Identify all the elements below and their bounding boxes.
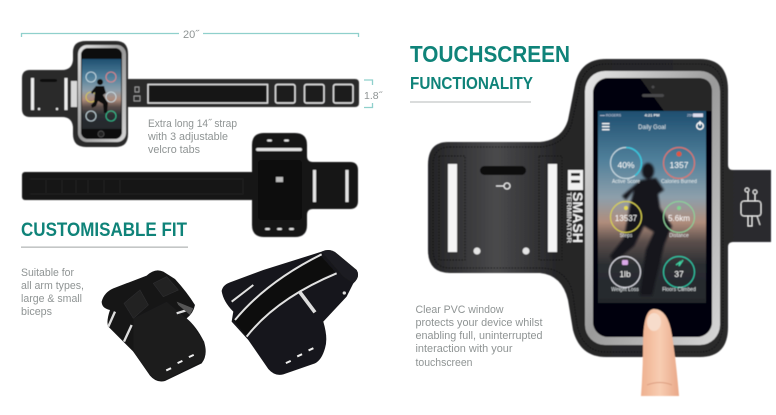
strap icon: earphones [741, 188, 761, 226]
runner [91, 79, 108, 113]
text: clear PVC description: enabling full, uninterrupted [416, 330, 542, 342]
metric: weight loss: 1lb [619, 269, 631, 279]
text: strap description: with 3 adjustable [147, 131, 228, 143]
metric: distance: 5.6km [668, 214, 690, 223]
metric: floors climbed [662, 256, 696, 293]
glass reflection [640, 78, 712, 111]
metric: active score [610, 148, 642, 185]
key icon [496, 183, 510, 189]
text: strap description: Extra long 14˝ strap [148, 118, 237, 130]
dimension: 20 inch bracket: 20˝ [183, 29, 200, 41]
heading: touchscreen functionality: TOUCHSCREEN [410, 41, 570, 67]
tag [276, 177, 283, 182]
metric: calories burned: Calories Burned [661, 179, 697, 185]
screen [598, 111, 706, 303]
runner silhouette [610, 163, 672, 295]
metric: weight loss: Weight Loss [611, 287, 639, 293]
text: strap description [147, 118, 237, 156]
metric: steps: 13537 [615, 214, 638, 223]
metric: active score: Active Score [612, 179, 640, 185]
markers A and B [474, 248, 530, 254]
metric: calories burned: 1357 [670, 160, 689, 170]
silver frame [585, 71, 720, 345]
text: strap description: velcro tabs [148, 144, 200, 156]
metric: distance: Distance [669, 233, 689, 239]
brand logo: SMASH [570, 192, 586, 243]
stitching [433, 64, 723, 352]
status bar: 25% [687, 114, 694, 118]
brand logo [565, 170, 586, 243]
status bar: •••• ROGERS [600, 114, 622, 118]
metric: active score: 40% [617, 160, 635, 170]
text: arm types description [21, 267, 84, 318]
adjustment tabs [276, 84, 353, 103]
heading rule [21, 246, 188, 248]
heading: touchscreen functionality: FUNCTIONALITY [410, 73, 533, 93]
finger [641, 309, 679, 396]
wrapped armband: right [222, 250, 358, 375]
strap and body [22, 41, 359, 147]
dimension: 20 inch bracket [22, 29, 358, 41]
phone [81, 48, 122, 139]
reflective strips and slots [256, 140, 348, 230]
speaker and camera [642, 86, 664, 97]
app header: Daily Goal [638, 125, 666, 131]
strap icons [134, 87, 140, 101]
dimension: 1.8 inch bracket: 1.8˝ [364, 90, 384, 102]
text: clear PVC description: interaction with your [416, 343, 513, 355]
band body [428, 59, 771, 357]
text: clear PVC description [416, 304, 542, 369]
wrapped armband: left [102, 270, 206, 382]
text: clear PVC description: touchscreen [416, 357, 472, 369]
earphone slot [480, 166, 526, 175]
silver frame [78, 45, 126, 142]
brand logo: TERMINATOR [565, 192, 572, 243]
text: clear PVC description: protects your device whilst [416, 317, 542, 329]
large armband [428, 59, 771, 396]
metric: steps: Steps [620, 233, 633, 239]
phone [593, 78, 712, 337]
metric: weight loss [610, 256, 640, 293]
armband back view [22, 133, 358, 237]
status bar: 4:21 PM [644, 112, 660, 118]
metric: steps [610, 202, 642, 239]
wing slots [31, 78, 68, 110]
wing slots [448, 164, 557, 252]
app header [602, 121, 703, 131]
metric: floors climbed: 37 [674, 269, 684, 279]
text: arm types description: all arm types, [21, 280, 84, 292]
heading: touchscreen functionality [410, 41, 570, 93]
velcro section [148, 84, 268, 103]
armband front view [22, 41, 359, 147]
heading: customisable fit: CUSTOMISABLE FIT [21, 219, 187, 241]
metric: floors climbed: Floors Climbed [662, 287, 696, 293]
heading rule [410, 102, 531, 103]
strap [22, 172, 257, 200]
metric: calories burned [661, 148, 697, 185]
stitched strap panels [30, 179, 243, 194]
screen [82, 59, 121, 129]
back body [252, 133, 358, 237]
app rings [86, 72, 116, 121]
metric: distance [664, 202, 694, 239]
text: arm types description: biceps [21, 306, 52, 318]
dimension: 1.8 inch bracket [364, 80, 384, 108]
text: clear PVC description: Clear PVC window [416, 304, 504, 316]
brand mark [71, 81, 77, 107]
text: arm types description: large & small [21, 293, 82, 305]
text: arm types description: Suitable for [21, 267, 74, 279]
status bar [600, 112, 703, 118]
